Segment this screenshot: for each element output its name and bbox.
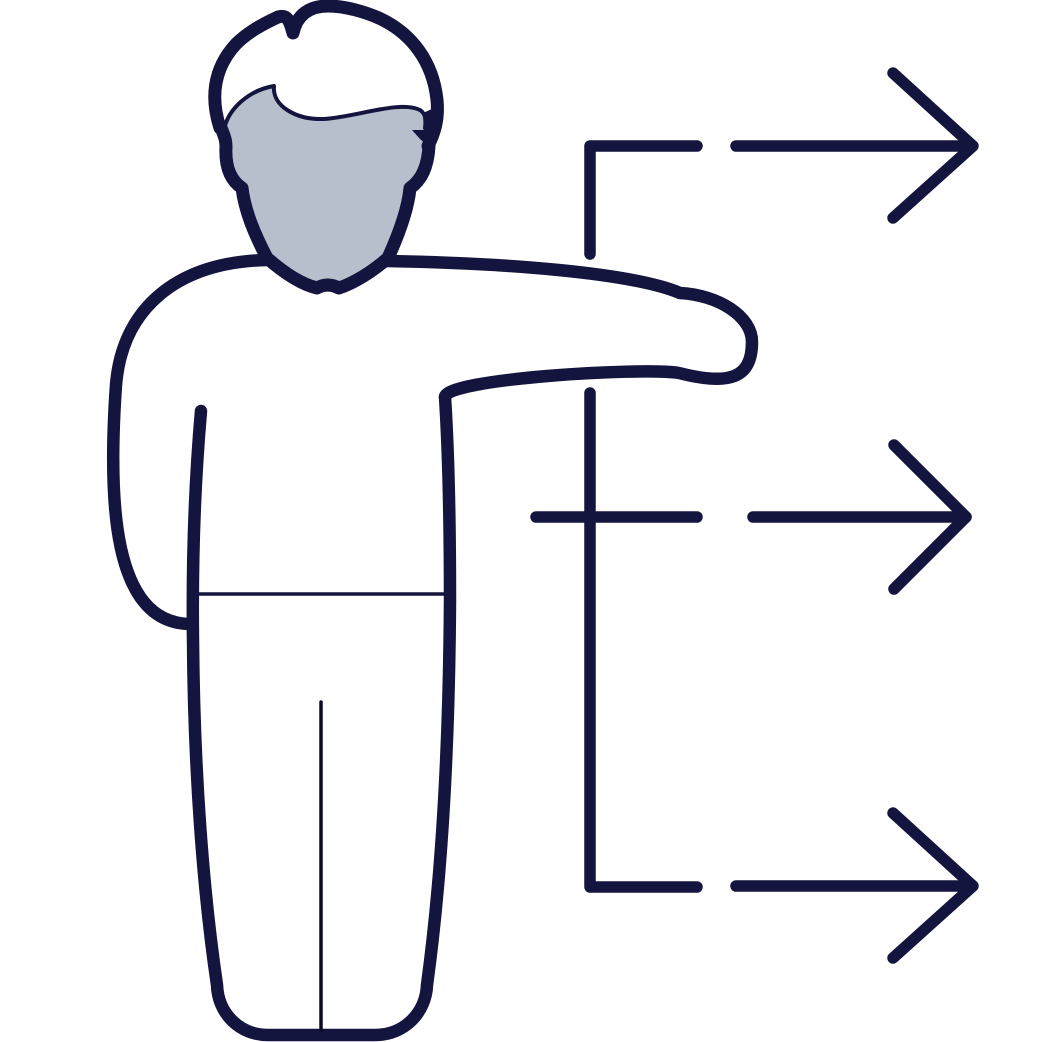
diagram: bracket and arrows xyxy=(536,73,973,958)
arrow: top xyxy=(736,73,973,218)
top bracket xyxy=(590,146,697,254)
face fill xyxy=(226,85,425,287)
icon: person figure xyxy=(113,6,752,1035)
leg divider xyxy=(319,702,323,1030)
hair outline xyxy=(215,6,437,146)
arrow: bottom xyxy=(736,813,973,958)
lower bracket xyxy=(590,393,697,887)
waistline xyxy=(198,592,445,596)
hair inner line xyxy=(224,86,425,130)
torso and legs outline xyxy=(193,397,450,1035)
middle tick xyxy=(536,511,697,523)
hair notch shadow xyxy=(412,108,434,144)
arrow: middle xyxy=(753,445,966,589)
body and arm outline xyxy=(113,260,267,624)
face outline xyxy=(222,130,429,288)
